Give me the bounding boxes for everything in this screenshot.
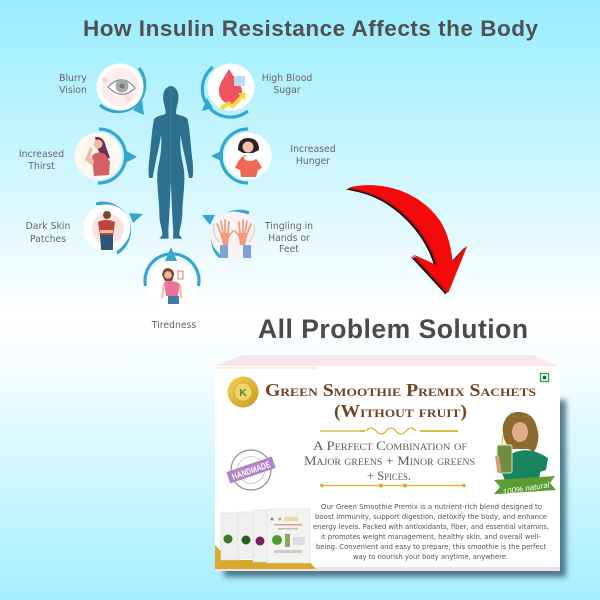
product title [265,380,536,421]
woman with green smoothie [495,412,548,483]
handmade stamp [226,450,276,490]
icon: woman [84,204,130,252]
description paragraph [313,503,549,561]
label: high blood sugar: High Blood [262,73,312,84]
description paragraph: Our Green Smoothie Premix is a nutrient-rich blend designed to [321,503,542,511]
description paragraph: way to nourish your body anytime, anywhere. [353,553,508,561]
description paragraph: energy levels. Packed with antioxidants, fiber, and essential vitamins, [313,523,549,531]
icon: tired woman [162,268,183,304]
label: increased hunger: Hunger [296,156,330,167]
label: tingling: Tingling in [264,221,313,232]
label: dark skin patches: Dark Skin [26,221,70,232]
symptom: tingling [202,211,313,258]
symptom: dark skin patches [26,203,143,253]
sachets [221,509,310,563]
label: high blood sugar: Sugar [273,85,301,96]
title: How Insulin Resistance Affects the Body [83,16,538,41]
icon: hands [210,212,258,258]
box front face [215,366,560,570]
label: blurry vision: Vision [59,85,87,96]
box bottom strip [215,567,560,571]
label: increased thirst: Thirst [27,161,55,172]
icon ring: thirst [98,129,137,183]
icon ring: hunger [211,129,248,183]
product title: Green Smoothie Premix Sachets [265,380,536,400]
label: increased hunger: Increased [290,144,336,155]
arrow: red curved arrow [346,185,468,294]
gold corner band [215,545,316,569]
symptom: high blood sugar [202,64,312,117]
symptom: blurry vision [59,64,145,115]
description paragraph: it promotes weight management, healthy skin, and overall well- [321,533,542,541]
gold seal [228,376,258,408]
description paragraph: being. Convenient and easy to prepare, this smoothie is the perfect [316,543,546,551]
icon: blood drop [208,64,254,110]
icon ring: dark skin [96,203,143,253]
ribbon: 100% natural [494,476,556,497]
icon: eye [96,64,144,110]
subheading [304,438,475,483]
symptom: increased hunger [211,129,336,183]
top ornament [320,428,458,434]
symptom: tiredness [145,247,199,331]
subheading: A Perfect Combination of [313,438,467,453]
gold seal: K [239,388,247,399]
subheading: + Spices. [367,468,411,483]
label: tiredness: Tiredness [151,320,196,331]
veg mark [540,374,548,382]
ribbon: 100% natural: 100% natural [502,480,550,497]
label: blurry vision: Blurry [59,73,87,84]
product title: (Without fruit) [334,401,467,421]
icon circle: tiredness [148,260,196,308]
icon: woman eating [224,132,272,180]
icon ring: blurry vision [100,68,145,115]
product box [215,355,566,577]
bottom ornament [321,484,465,487]
label: tingling: Hands or [268,233,310,244]
body silhouette [149,86,193,239]
handmade stamp: HANDMADE [231,459,272,482]
icon ring: tingling [202,211,249,257]
label: tingling: Feet [279,244,299,255]
label: dark skin patches: Patches [30,234,66,245]
top accent line [215,367,316,369]
icon ring: tiredness [145,247,199,286]
icon: woman drinking [74,132,122,180]
description paragraph: boost immunity, support digestion, detoxify the body, and enhance [315,513,547,521]
heading: all problem solution: All Problem Solution [258,314,528,344]
label: increased thirst: Increased [19,149,64,160]
box top face [215,355,560,367]
box shadow [224,400,566,577]
subheading: Major greens + Minor greens [304,453,475,468]
icon ring: high blood sugar [202,67,248,117]
symptom: increased thirst [19,129,137,183]
